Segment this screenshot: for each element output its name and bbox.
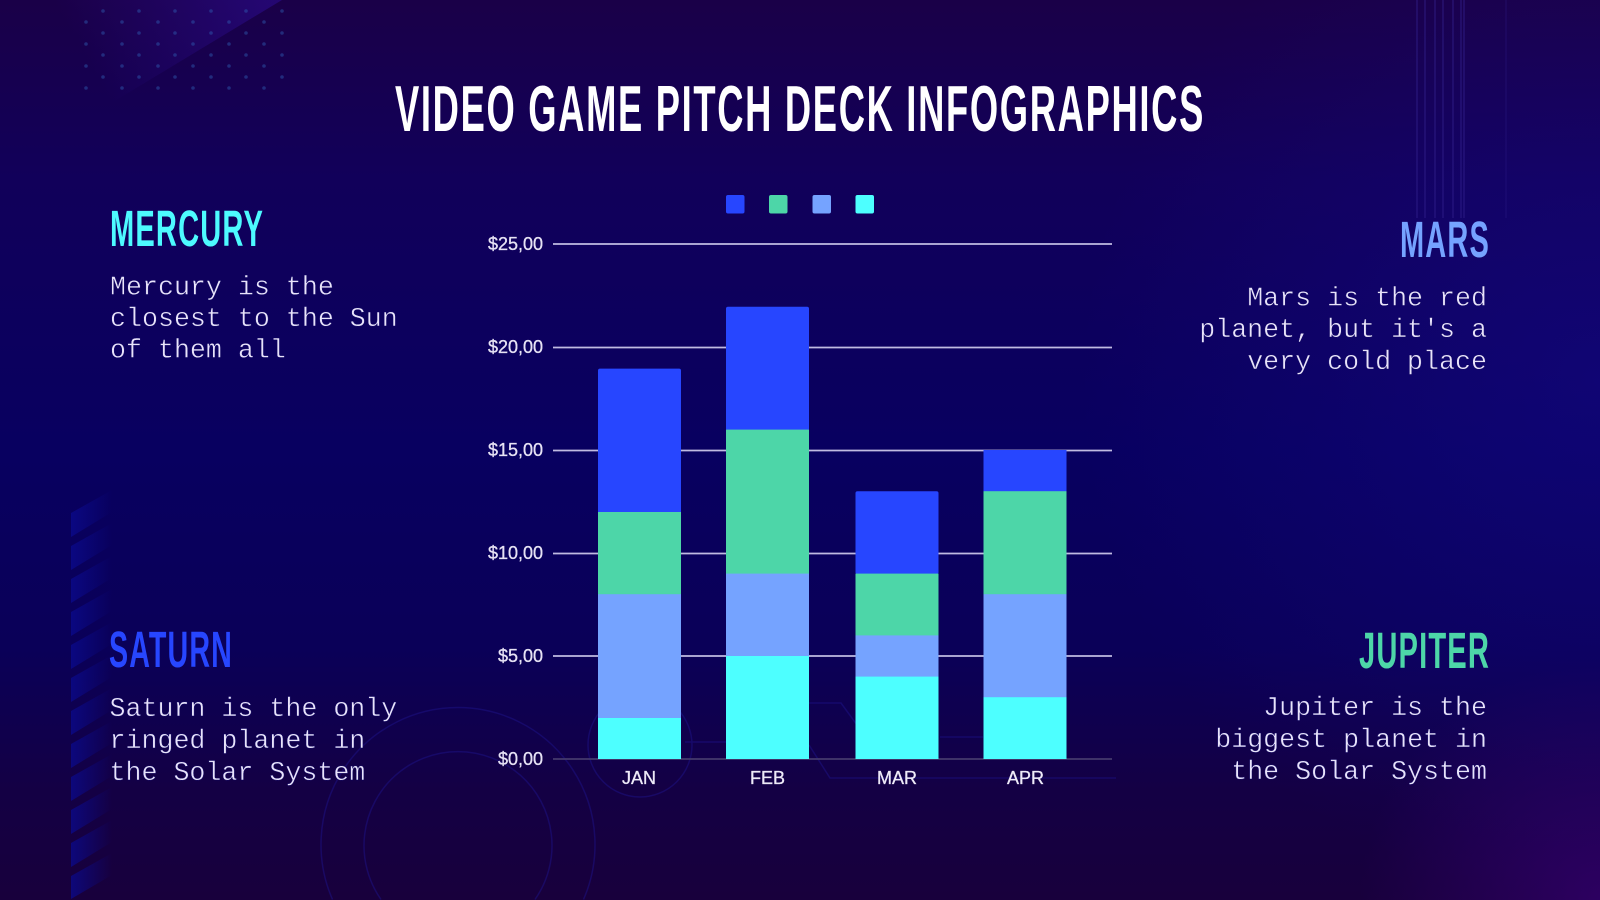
decoration: vertical lines bbox=[1417, 0, 1506, 218]
y axis labels: $0,00 bbox=[498, 749, 543, 769]
text: Saturn description: the Solar System bbox=[110, 759, 365, 789]
x axis labels: JAN bbox=[622, 768, 656, 788]
heading: Jupiter: JUPITER bbox=[1359, 622, 1490, 679]
bar: MAR bbox=[856, 491, 938, 759]
text: Mars description: planet, but it's a bbox=[1199, 316, 1487, 346]
text: Jupiter description: the Solar System bbox=[1231, 758, 1487, 788]
text: Saturn description: ringed planet in bbox=[110, 727, 365, 757]
heading: Mercury: MERCURY bbox=[110, 200, 264, 257]
stacked bar chart bbox=[488, 195, 1112, 788]
y axis labels bbox=[488, 234, 543, 769]
text: Jupiter description: Jupiter is the bbox=[1263, 694, 1487, 724]
y axis labels: $15,00 bbox=[488, 440, 543, 460]
text: Mercury description: closest to the Sun bbox=[110, 305, 398, 335]
bar: APR bbox=[984, 450, 1066, 759]
panel: Saturn bbox=[109, 621, 397, 789]
heading: Mars: MARS bbox=[1400, 211, 1490, 268]
panel: Mars bbox=[1199, 211, 1490, 378]
y axis labels: $25,00 bbox=[488, 234, 543, 254]
x axis labels: FEB bbox=[750, 768, 785, 788]
text: Mars description: Mars is the red bbox=[1247, 284, 1487, 314]
heading: Saturn: SATURN bbox=[109, 621, 233, 678]
x axis labels: APR bbox=[1007, 768, 1044, 788]
decoration: diagonal stripes bbox=[71, 490, 112, 899]
y axis labels: $10,00 bbox=[488, 543, 543, 563]
grid lines bbox=[553, 244, 1112, 759]
bar: JAN bbox=[598, 369, 681, 759]
y axis labels: $5,00 bbox=[498, 646, 543, 666]
panel: Mercury bbox=[110, 200, 398, 366]
text: Saturn description: Saturn is the only bbox=[110, 695, 397, 725]
decoration: circles and circuit lines bbox=[321, 693, 1116, 900]
text: Mercury description: Mercury is the bbox=[110, 274, 334, 304]
chart legend bbox=[726, 195, 874, 214]
decoration: dot grid bbox=[84, 9, 284, 90]
text: Mars description: very cold place bbox=[1247, 348, 1487, 378]
y axis labels: $20,00 bbox=[488, 337, 543, 357]
panel: Jupiter bbox=[1215, 622, 1490, 788]
x axis labels: MAR bbox=[877, 768, 917, 788]
bar: FEB bbox=[726, 307, 809, 759]
x axis labels bbox=[622, 768, 1044, 788]
text: Mercury description: of them all bbox=[110, 336, 286, 366]
text: Jupiter description: biggest planet in bbox=[1215, 726, 1487, 756]
